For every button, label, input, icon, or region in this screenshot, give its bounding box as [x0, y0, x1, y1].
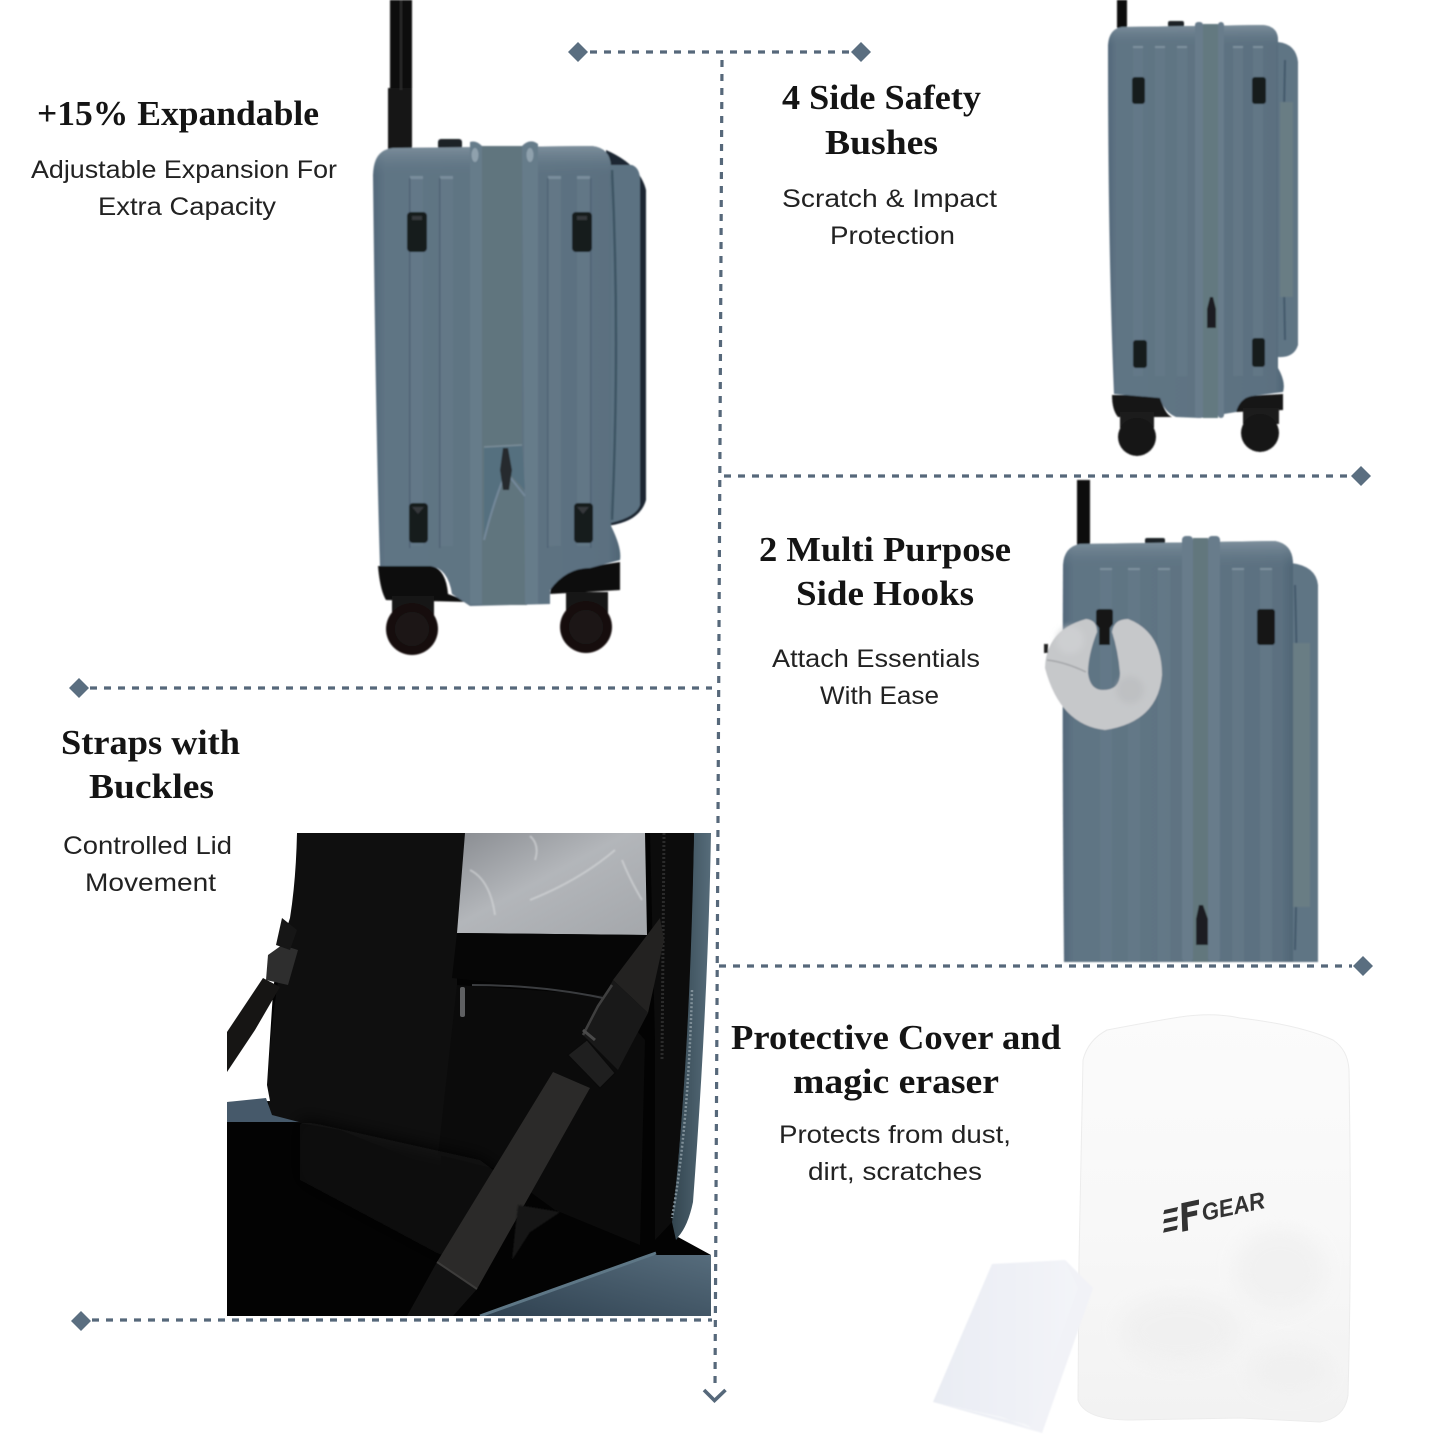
zipper pull	[1207, 297, 1216, 328]
clear pocket window	[457, 833, 647, 935]
black fabric band	[452, 933, 645, 978]
arrow head	[704, 1390, 726, 1400]
lock button	[1168, 21, 1184, 28]
text block: straps: Straps with	[61, 723, 240, 762]
expansion gusset	[470, 141, 538, 605]
shell rim and zip	[650, 833, 711, 1240]
text block: straps: Buckles	[89, 767, 214, 806]
hard shell	[1108, 25, 1284, 418]
front pocket	[1278, 42, 1298, 357]
suitcase: safety bushes side view	[1108, 0, 1298, 456]
inner shadow detail	[512, 1205, 560, 1260]
magic eraser sponge	[933, 1260, 1093, 1433]
left rim	[227, 1098, 299, 1122]
F GEAR logo: GEAR	[1199, 1187, 1268, 1227]
text block: expandable: Extra Capacity	[98, 193, 277, 221]
suitcase: expandable side view	[373, 0, 646, 655]
text block: safety bushes: Scratch & Impact	[782, 185, 997, 213]
zipper pull	[500, 448, 512, 490]
text block: side hooks	[759, 530, 1011, 710]
text block: protective cover: dirt, scratches	[808, 1158, 982, 1186]
lower mesh pocket	[443, 1009, 456, 1136]
lock button	[1145, 538, 1165, 545]
expansion gusset	[1195, 22, 1224, 418]
white background wedges	[227, 833, 297, 1102]
zipper pull	[1196, 905, 1208, 945]
main strap	[407, 1072, 590, 1316]
text block: safety bushes	[782, 78, 997, 250]
telescopic handle	[1117, 0, 1127, 28]
F GEAR logo	[1158, 1186, 1268, 1236]
text block: straps	[61, 723, 240, 897]
expansion gusset	[1182, 536, 1220, 962]
wheels and base	[1112, 394, 1283, 456]
safety bushes	[1132, 77, 1266, 368]
text block: side hooks: Attach Essentials	[772, 645, 980, 673]
telescopic handle	[1077, 480, 1090, 546]
left strap and buckle	[227, 918, 298, 1072]
pocket zipper	[460, 985, 603, 1017]
text block: safety bushes: 4 Side Safety	[782, 78, 982, 117]
safety bushes	[407, 212, 593, 543]
text block: side hooks: Side Hooks	[796, 574, 974, 613]
text block: expandable: Adjustable Expansion For	[31, 156, 337, 184]
hard shell	[373, 146, 620, 606]
text block: expandable: +15% Expandable	[37, 94, 319, 133]
front pocket	[1291, 563, 1318, 962]
right bush	[1257, 609, 1275, 645]
hard shell	[1063, 541, 1293, 962]
text block: safety bushes: Protection	[830, 222, 955, 250]
strap buckle	[568, 918, 664, 1088]
text block: side hooks: 2 Multi Purpose	[759, 530, 1011, 569]
text block: straps: Movement	[85, 869, 216, 897]
text block: straps: Controlled Lid	[63, 832, 232, 860]
text block: protective cover: Protective Cover and	[731, 1018, 1062, 1057]
text block: protective cover: Protects from dust,	[779, 1121, 1011, 1149]
protective cover bag	[1078, 1015, 1350, 1422]
lower shell	[480, 1253, 711, 1316]
lock button	[438, 139, 462, 151]
front pocket	[606, 150, 646, 526]
text block: safety bushes: Bushes	[825, 123, 938, 162]
text block: side hooks: With Ease	[820, 682, 939, 710]
text block: protective cover: magic eraser	[793, 1062, 999, 1101]
photo: straps with buckles interior	[227, 833, 711, 1316]
neck pillow	[1044, 619, 1162, 730]
side hook	[1096, 609, 1113, 645]
suitcase: side hooks view	[1044, 480, 1318, 962]
text block: protective cover	[731, 1018, 1062, 1186]
mesh lid lining	[267, 833, 465, 1170]
telescopic handle	[388, 0, 412, 150]
wheels and base	[378, 562, 620, 655]
lid bottom soft band	[300, 1124, 493, 1254]
text block: expandable	[31, 94, 337, 221]
